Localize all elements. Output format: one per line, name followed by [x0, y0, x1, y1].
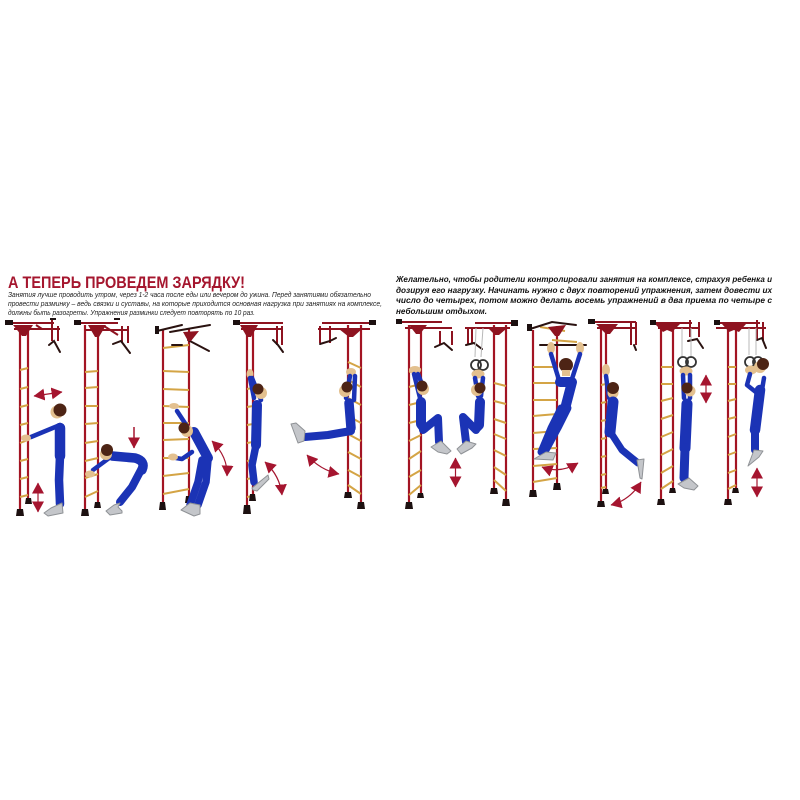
text block: parents advice: дозируя его нагрузку. Начинать нужно с двух повторений упражнения, затем довести их	[396, 285, 773, 295]
arrow: vertical	[454, 458, 456, 487]
exercise 7: knee raise on rings	[457, 320, 518, 506]
text block: warm-up intro: Занятия лучше проводить утром, через 1-2 часа после еды или вечером до ужина. Перед занятиями обязательно	[8, 290, 371, 299]
exercise 3: side bend	[155, 325, 227, 516]
arrow: curved	[212, 441, 227, 476]
text block: parents advice: число до четырех, потом можно делать восемь упражнений в два приема по четыре с	[396, 295, 772, 305]
text block: parents advice: Желательно, чтобы родители контролировали занятия на комплексе, страхуя ребенка и	[395, 274, 773, 284]
text block: parents advice: небольшим отдыхом.	[396, 306, 487, 316]
exercise 11: ring pull-up	[714, 320, 769, 505]
arrow: curved	[307, 455, 339, 474]
exercise 4: straight hang	[233, 320, 283, 514]
exercise 9: leg swing	[588, 319, 644, 507]
title: А ТЕПЕРЬ ПРОВЕДЕМ ЗАРЯДКУ!	[8, 273, 245, 292]
exercise 2: forward bend	[74, 318, 143, 516]
exercise 8: chin-up bar hang	[527, 322, 586, 497]
exercise 10: ring hang	[650, 320, 706, 505]
text block: warm-up intro	[8, 290, 382, 317]
arrow: horizontal	[34, 392, 62, 396]
exercise 1: standing stretch	[5, 318, 66, 516]
exercise 5: leg raise	[291, 320, 376, 509]
arrow: vertical	[705, 375, 707, 403]
arrow: downward	[133, 427, 135, 448]
arrow: curved	[265, 462, 282, 495]
exercise 6: knee raise left	[396, 319, 456, 509]
text block: warm-up intro: провести разминку – ведь связки и суставы, на которые приходится основная нагрузка при занятиях на комплексе,	[8, 299, 382, 308]
arrow: curved	[542, 463, 578, 470]
arrow: vertical	[37, 483, 39, 512]
text block: parents advice	[395, 274, 773, 316]
text block: warm-up intro: должны быть разогреты. Упражнения разминки следует повторять по 10 раз.	[8, 308, 255, 317]
arrow: curved	[611, 482, 641, 505]
arrow: vertical	[756, 468, 758, 497]
